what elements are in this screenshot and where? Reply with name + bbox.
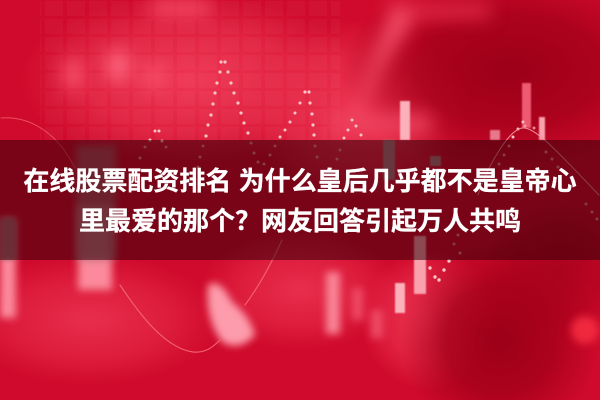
dark translucent title band: [0, 140, 600, 260]
title: [23, 166, 577, 238]
grid texture: [40, 0, 340, 140]
trend curves: [1, 118, 599, 352]
title: 在线股票配资排名 为什么皇后几乎都不是皇帝心: [23, 166, 577, 196]
title: 里最爱的那个？网友回答引起万人共鸣: [79, 201, 521, 238]
dotted trend line: [148, 60, 524, 282]
candlesticks: [0, 83, 545, 313]
dots under band: [138, 124, 598, 254]
